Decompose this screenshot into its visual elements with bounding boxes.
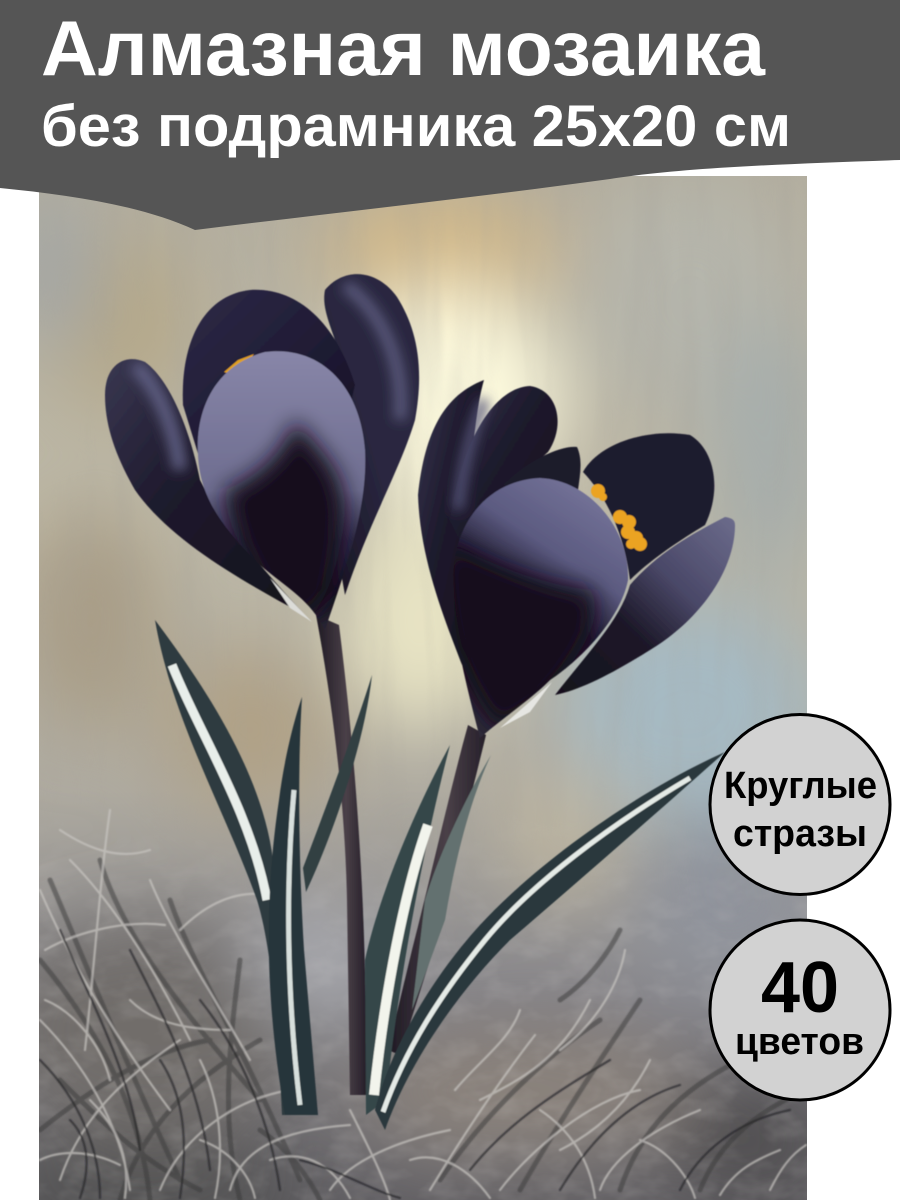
right flower — [418, 380, 735, 738]
petal: front — [198, 351, 365, 630]
picture: crocus painting — [0, 176, 830, 1200]
leaf: centre right — [365, 745, 450, 1115]
petal: top right — [583, 433, 714, 580]
leaf: thin — [303, 675, 372, 892]
plants — [105, 274, 735, 1130]
badge: round rhinestones: стразы — [733, 813, 867, 855]
petal: back left outer — [418, 380, 484, 665]
petal: front — [444, 478, 628, 738]
dry grass — [40, 810, 806, 1200]
header banner — [0, 0, 900, 230]
right flower stem — [388, 725, 486, 1055]
badge: 40 colours: цветов — [735, 1021, 864, 1063]
stamen — [224, 354, 254, 374]
painted background — [0, 176, 830, 1200]
title: Алмазная мозаика — [41, 4, 766, 92]
leaf: centre left — [269, 697, 318, 1115]
petal: right back — [324, 274, 419, 595]
subtitle: без подрамника 25х20 см — [41, 94, 791, 159]
petal: back left inner — [447, 385, 558, 530]
petal: small back — [503, 447, 581, 490]
petal: inner back — [183, 290, 355, 460]
badge: round rhinestones — [710, 714, 890, 894]
left flower stem — [316, 615, 366, 1095]
leaf: long right — [375, 752, 725, 1130]
left calyx highlight — [270, 578, 312, 622]
badge: 40 colours: 40 — [761, 948, 839, 1028]
petal: left — [105, 359, 305, 615]
leaf: pale back — [412, 755, 491, 1010]
left flower — [105, 274, 419, 630]
badge: round rhinestones: Круглые — [724, 765, 877, 807]
badge: 40 colours — [710, 920, 890, 1100]
leaf: far left — [154, 620, 286, 1116]
calyx highlight — [500, 682, 552, 728]
stamens — [591, 484, 647, 551]
petal: lower right — [555, 517, 735, 695]
